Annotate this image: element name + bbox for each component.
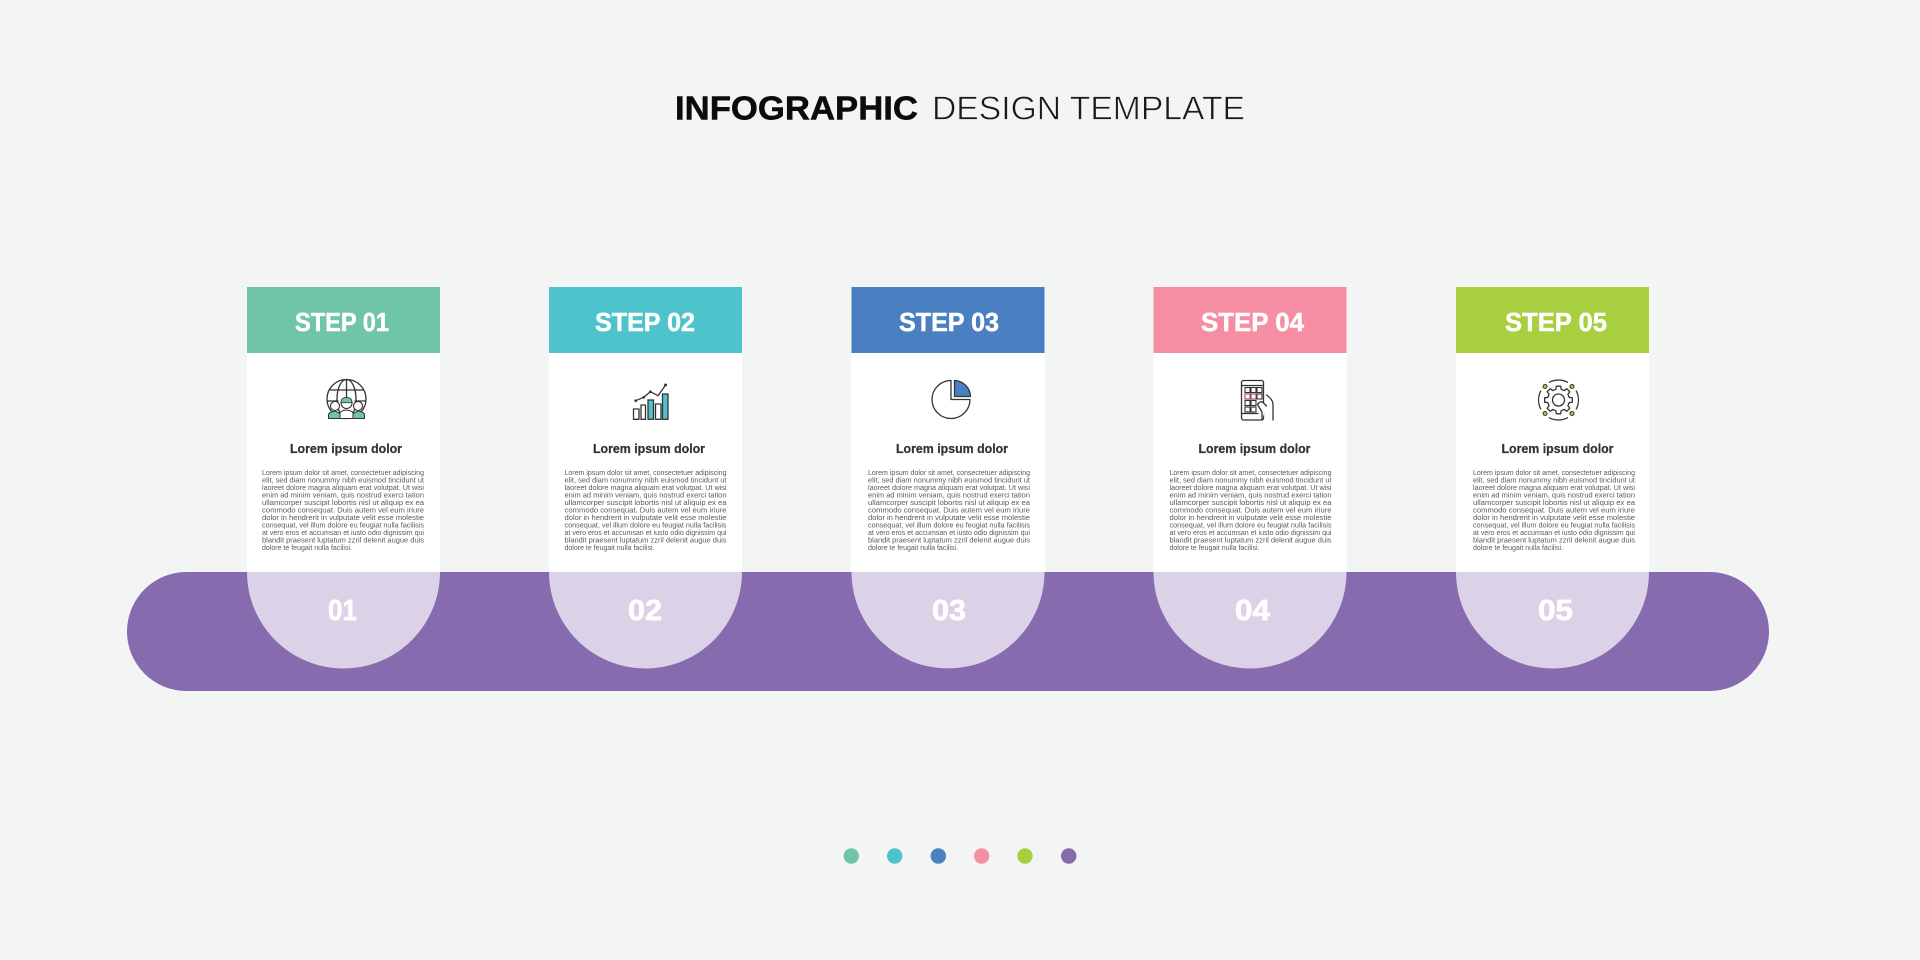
- step 04 subtitle: Lorem ipsum dolor: [1198, 441, 1310, 456]
- semicircle tab: [247, 572, 440, 668]
- step 01 body text: blandit praesent luptatum zzril delenit augue duis: [262, 538, 425, 544]
- step 02 body text: ullamcorper suscipit lobortis nisl ut aliquip ex ea: [564, 500, 727, 507]
- step 05 body text: [1473, 470, 1636, 552]
- step 01 body text: ullamcorper suscipit lobortis nisl ut aliquip ex ea: [262, 500, 424, 507]
- step 04 body text: elit, sed diam nonummy nibh euismod tincidunt ut: [1170, 478, 1332, 484]
- step 03 body text: laoreet dolore magna aliquam erat volutpat. Ut wisi: [868, 485, 1030, 492]
- step 04 body text: [1170, 470, 1332, 552]
- title: [675, 90, 1245, 127]
- step 02 body text: enim ad minim veniam, quis nostrud exerci tation: [564, 492, 727, 500]
- panel: step 01: [247, 287, 440, 668]
- semicircle tab: [852, 572, 1044, 668]
- step 01 body text: elit, sed diam nonummy nibh euismod tincidunt ut: [262, 478, 424, 484]
- step 02 subtitle: Lorem ipsum dolor: [593, 441, 705, 456]
- step 04 body text: enim ad minim veniam, quis nostrud exerci tation: [1170, 492, 1332, 500]
- step 01 body text: consequat, vel illum dolore eu feugiat nulla facilisis: [262, 522, 425, 530]
- number 04: 04: [1235, 595, 1270, 627]
- step 05 subtitle: Lorem ipsum dolor: [1502, 441, 1614, 456]
- icon: hand holding phone: [1242, 380, 1273, 420]
- card body: [247, 353, 440, 572]
- step 01 subtitle: Lorem ipsum dolor: [290, 441, 402, 456]
- step 05 body text: elit, sed diam nonummy nibh euismod tincidunt ut: [1473, 478, 1635, 484]
- icon: rising bar chart: [634, 384, 668, 419]
- step 02 body text: at vero eros et accumsan et iusto odio dignissim qui: [564, 530, 727, 537]
- step 04 body text: dolore te feugait nulla facilisi.: [1170, 545, 1260, 552]
- step 03 body text: dolore te feugait nulla facilisi.: [868, 545, 958, 552]
- step 05 heading: STEP 05: [1505, 307, 1607, 337]
- step 02 body text: elit, sed diam nonummy nibh euismod tincidunt ut: [564, 478, 727, 484]
- number 01: 01: [328, 595, 357, 627]
- step 05 body text: laoreet dolore magna aliquam erat volutpat. Ut wisi: [1473, 485, 1635, 492]
- step 02 body text: [564, 470, 727, 552]
- step 04 body text: laoreet dolore magna aliquam erat volutpat. Ut wisi: [1170, 485, 1332, 492]
- step 03 body text: consequat, vel illum dolore eu feugiat nulla facilisis: [868, 522, 1031, 530]
- step 01 heading: STEP 01: [295, 307, 389, 337]
- card body: [1154, 353, 1346, 572]
- step 01 body text: [262, 470, 425, 552]
- step 05 body text: blandit praesent luptatum zzril delenit augue duis: [1473, 538, 1636, 544]
- step 02 body text: laoreet dolore magna aliquam erat volutpat. Ut wisi: [564, 485, 727, 492]
- number 03: 03: [932, 595, 966, 627]
- step 02 header: [549, 287, 742, 353]
- step 03 heading: STEP 03: [899, 307, 999, 337]
- step 04 body text: ullamcorper suscipit lobortis nisl ut aliquip ex ea: [1170, 500, 1332, 507]
- step 03 subtitle: Lorem ipsum dolor: [896, 441, 1008, 456]
- step 03 body text: dolor in hendrerit in vulputate velit esse molestie: [868, 515, 1030, 522]
- step 02 body text: dolor in hendrerit in vulputate velit esse molestie: [564, 515, 727, 522]
- step 02 body text: commodo consequat. Duis autem vel eum iriure: [564, 508, 727, 514]
- step 02 body text: Lorem ipsum dolor sit amet, consectetuer adipiscing: [564, 470, 727, 477]
- panel: step 03: [852, 287, 1044, 668]
- step 04 heading: STEP 04: [1201, 307, 1305, 337]
- icon: pie chart: [932, 380, 970, 418]
- semicircle tab: [1456, 572, 1649, 668]
- step 02 heading: STEP 02: [595, 307, 695, 337]
- colour legend dots: [844, 848, 1076, 864]
- step 03 body text: at vero eros et accumsan et iusto odio dignissim qui: [868, 530, 1030, 537]
- step 04 body text: dolor in hendrerit in vulputate velit esse molestie: [1170, 515, 1332, 522]
- card body: [1456, 353, 1649, 572]
- step 05 body text: Lorem ipsum dolor sit amet, consectetuer adipiscing: [1473, 470, 1635, 477]
- step 01 body text: Lorem ipsum dolor sit amet, consectetuer adipiscing: [262, 470, 424, 477]
- purple timeline band: [127, 572, 1769, 691]
- step 03 body text: ullamcorper suscipit lobortis nisl ut aliquip ex ea: [868, 500, 1030, 507]
- step 03 body text: commodo consequat. Duis autem vel eum iriure: [868, 508, 1030, 514]
- step 01 body text: enim ad minim veniam, quis nostrud exerci tation: [262, 492, 424, 500]
- step 01 body text: at vero eros et accumsan et iusto odio dignissim qui: [262, 530, 424, 537]
- number 02: 02: [628, 595, 662, 627]
- step 03 body text: blandit praesent luptatum zzril delenit augue duis: [868, 538, 1031, 544]
- step 01 body text: dolore te feugait nulla facilisi.: [262, 545, 352, 552]
- semicircle tab: [549, 572, 742, 668]
- semicircle tab: [1154, 572, 1346, 668]
- step 05 body text: consequat, vel illum dolore eu feugiat nulla facilisis: [1473, 522, 1636, 530]
- step 03 body text: [868, 470, 1031, 552]
- step 01 body text: commodo consequat. Duis autem vel eum iriure: [262, 508, 424, 514]
- step 04 body text: Lorem ipsum dolor sit amet, consectetuer adipiscing: [1170, 470, 1332, 477]
- step 01 body text: dolor in hendrerit in vulputate velit esse molestie: [262, 515, 424, 522]
- step 02 body text: blandit praesent luptatum zzril delenit augue duis: [564, 538, 727, 544]
- step 03 body text: elit, sed diam nonummy nibh euismod tincidunt ut: [868, 478, 1030, 484]
- step 05 body text: commodo consequat. Duis autem vel eum iriure: [1473, 508, 1635, 514]
- card body: [549, 353, 742, 572]
- step 03 body text: Lorem ipsum dolor sit amet, consectetuer adipiscing: [868, 470, 1030, 477]
- step 03 body text: enim ad minim veniam, quis nostrud exerci tation: [868, 492, 1030, 500]
- step 02 body text: dolore te feugait nulla facilisi.: [564, 545, 655, 552]
- icon: gear with orbit: [1539, 380, 1578, 420]
- step 04 body text: blandit praesent luptatum zzril delenit augue duis: [1170, 538, 1332, 544]
- step 04 body text: at vero eros et accumsan et iusto odio dignissim qui: [1170, 530, 1332, 537]
- card body: [852, 353, 1044, 572]
- panel: step 04: [1154, 287, 1346, 668]
- step 05 body text: dolor in hendrerit in vulputate velit esse molestie: [1473, 515, 1635, 522]
- step 05 body text: ullamcorper suscipit lobortis nisl ut aliquip ex ea: [1473, 500, 1635, 507]
- step 04 body text: commodo consequat. Duis autem vel eum iriure: [1170, 508, 1332, 514]
- step 04 body text: consequat, vel illum dolore eu feugiat nulla facilisis: [1170, 522, 1332, 530]
- step 04 header: [1154, 287, 1346, 353]
- title: DESIGN TEMPLATE: [932, 90, 1245, 127]
- step 03 header: [852, 287, 1044, 353]
- step 02 body text: consequat, vel illum dolore eu feugiat nulla facilisis: [564, 522, 727, 530]
- panel: step 02: [549, 287, 742, 668]
- panel: step 05: [1456, 287, 1649, 668]
- step 01 header: [247, 287, 440, 353]
- title: INFOGRAPHIC: [675, 90, 918, 127]
- step 05 header: [1456, 287, 1649, 353]
- number 05: 05: [1538, 595, 1573, 627]
- step 01 body text: laoreet dolore magna aliquam erat volutpat. Ut wisi: [262, 485, 424, 492]
- step 05 body text: enim ad minim veniam, quis nostrud exerci tation: [1473, 492, 1635, 500]
- icon: globe with people: [327, 380, 366, 418]
- step 05 body text: at vero eros et accumsan et iusto odio dignissim qui: [1473, 530, 1635, 537]
- step 05 body text: dolore te feugait nulla facilisi.: [1473, 545, 1563, 552]
